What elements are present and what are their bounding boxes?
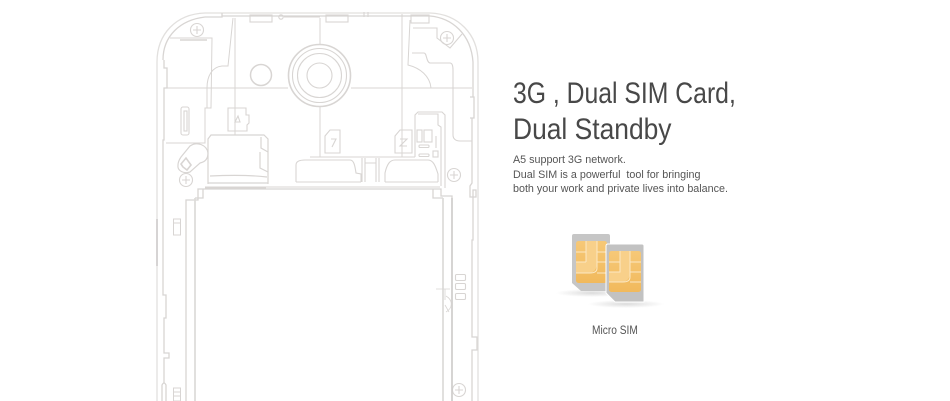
description: [513, 154, 728, 195]
SIM tray block: [415, 112, 445, 188]
SIM card back: [572, 234, 610, 291]
inner guide lines: [166, 14, 472, 157]
battery frame: [186, 189, 452, 401]
flash ring: [250, 64, 272, 86]
right antenna trace: [412, 28, 472, 141]
SIM slots: [205, 157, 440, 187]
description: A5 support 3G network.: [513, 154, 626, 166]
camera: [288, 44, 350, 106]
phone body outline: [157, 13, 478, 401]
title: Dual Standby: [513, 113, 672, 146]
SIM card front: [606, 244, 644, 302]
title: [513, 77, 736, 146]
three vent slots: [456, 274, 466, 300]
SIM label: Micro SIM: [592, 325, 638, 337]
title: 3G , Dual SIM Card,: [513, 77, 736, 110]
description: Dual SIM is a powerful tool for bringing: [513, 169, 700, 181]
top connectors: [250, 12, 429, 23]
SIM label 2: [395, 130, 412, 153]
speaker slot: [181, 107, 189, 135]
shadows: [556, 289, 664, 308]
screws: [180, 24, 466, 396]
side latches: [174, 219, 180, 401]
SIM label 1: [325, 130, 340, 153]
micro SD label: [228, 108, 249, 131]
card slot left: [205, 135, 268, 188]
antenna mark: [436, 289, 451, 312]
hook bracket: [178, 144, 208, 173]
description: both your work and private lives into balance.: [513, 183, 728, 195]
